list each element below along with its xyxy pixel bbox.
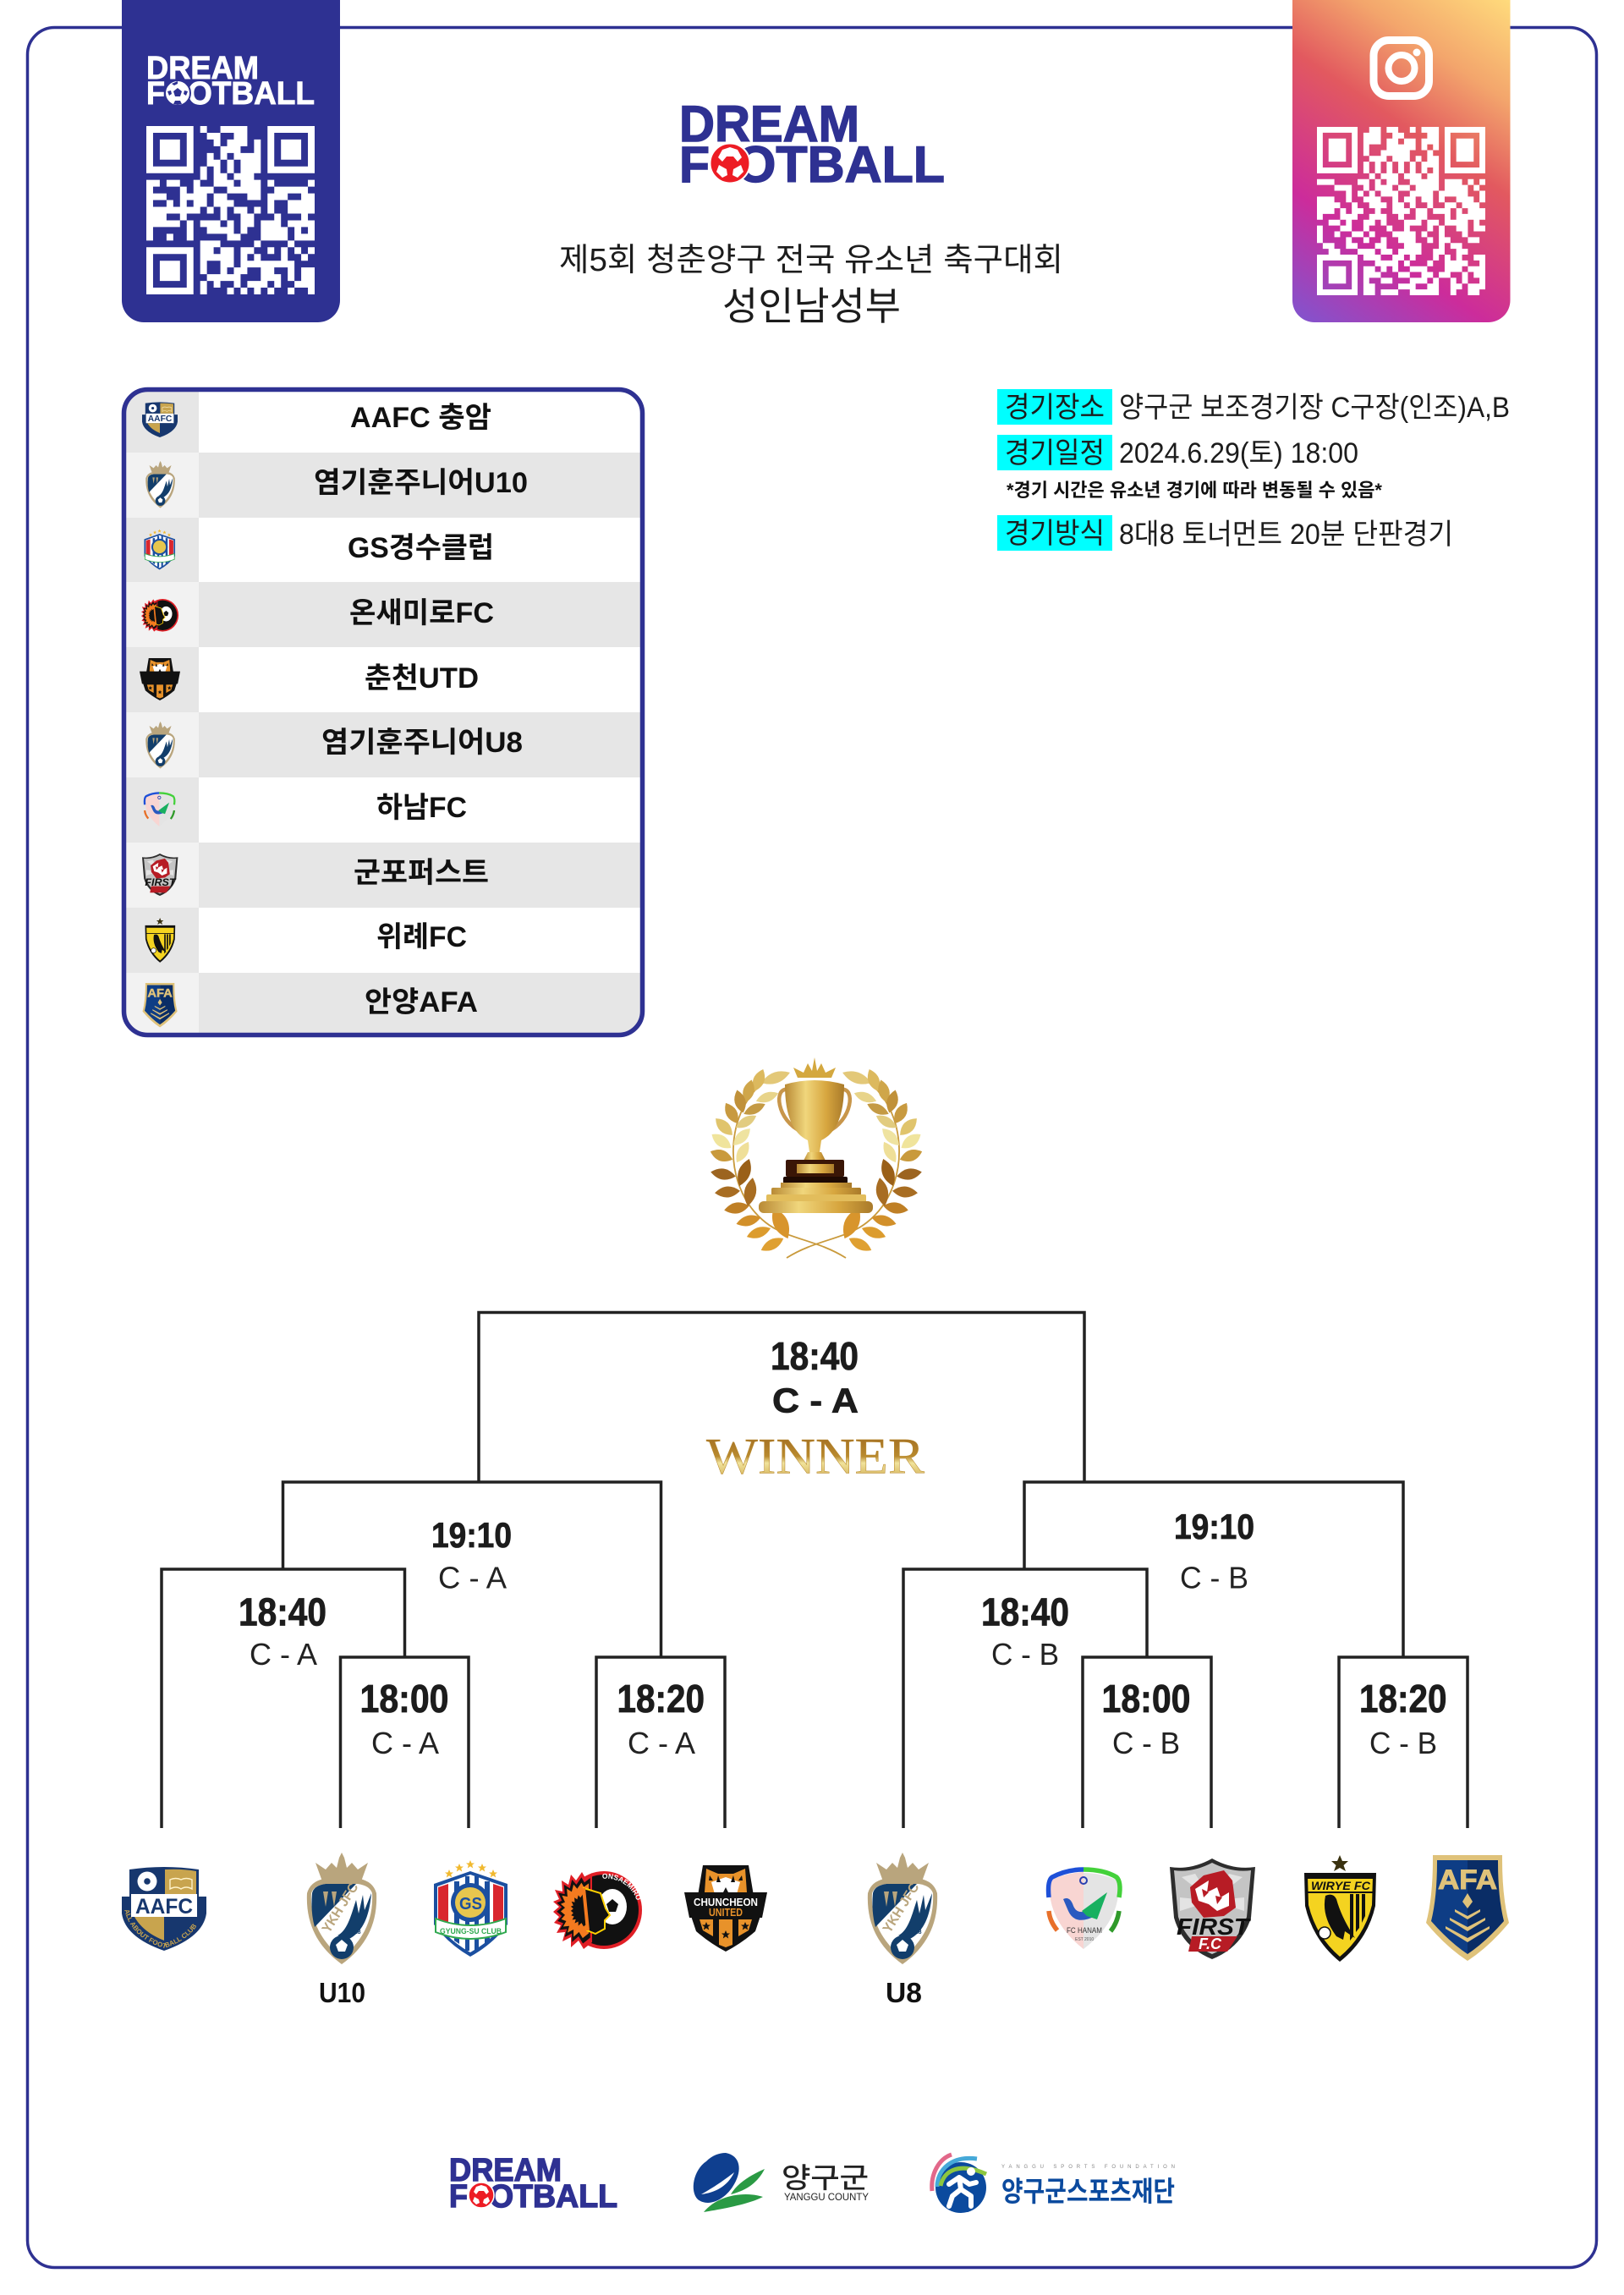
logo: dream football main: OTBALL — [736, 136, 945, 193]
crest: Onsaemiro — [553, 1871, 642, 1949]
crest: AAFC — [122, 1867, 206, 1951]
panel: match info: 경기방식 — [1005, 518, 1105, 550]
match label: right 18:20: 18:20 — [1359, 1677, 1446, 1721]
panel: dream football QR tab — [122, 0, 340, 322]
logo: dream football white: F — [146, 76, 165, 112]
QR code: dream football — [146, 129, 315, 291]
crest: AFA — [1426, 1855, 1509, 1961]
logo: yanggu sports foundation: 양구군스포츠재단 — [1001, 2176, 1175, 2207]
logo: dream football white: DREAM — [146, 51, 259, 86]
team row: 군포: FIRST — [145, 877, 176, 888]
crest: YKH JFC U8: YKH JFC — [881, 1880, 923, 1935]
logo: yanggu county: 양구군 — [782, 2162, 869, 2193]
team row: GS — [144, 530, 494, 569]
match label: right 18:00: C - B — [1112, 1726, 1180, 1760]
team row: 군포: 군포퍼스트 — [354, 857, 489, 889]
logo: dream football footer: OTBALL — [489, 2179, 617, 2215]
logo: yanggu county: YANGGU COUNTY — [784, 2191, 869, 2203]
panel: match info: 2024.6.29(토) 18:00 — [1119, 437, 1358, 469]
match label: left 18:00: 18:00 — [360, 1677, 448, 1721]
crest: YKH JFC U8: 2018 — [908, 1930, 922, 1935]
team row: 온새미로 — [141, 597, 494, 632]
quarterfinal label: right 18:40 — [981, 1590, 1069, 1672]
panel: match info — [997, 389, 1510, 551]
crest: First FC — [1170, 1859, 1255, 1959]
quarterfinal label: left 18:40: 18:40 — [239, 1590, 326, 1634]
team row: 춘천: 춘천UTD — [365, 662, 479, 695]
team row: U10 — [145, 461, 528, 508]
crest: YKH JFC U8 — [868, 1853, 937, 1964]
crest: FC Hanam: EST 2010 — [1075, 1937, 1094, 1942]
panel: match info: 8대8 토너먼트 20분 단판경기 — [1119, 519, 1453, 551]
match label: left 18:00: C - A — [371, 1726, 439, 1760]
label: U10: U10 — [319, 1977, 365, 2008]
crest: YKH JFC U10: 2018 — [348, 1930, 361, 1935]
crest: First FC: F.C — [1199, 1935, 1222, 1952]
match label: left 18:20: C - A — [628, 1726, 695, 1760]
match label: right 18:00 — [1101, 1677, 1191, 1760]
final match label: C - A — [772, 1381, 859, 1419]
team row: 하남 — [145, 792, 467, 826]
match label: left 18:00 — [360, 1677, 448, 1760]
panel: instagram QR tab — [1292, 0, 1511, 322]
crest: YKH JFC U10 — [307, 1853, 376, 1964]
semifinal label: left — [431, 1515, 512, 1595]
semifinal label: left: 19:10 — [431, 1515, 512, 1555]
logo: yanggu sports foundation: YANGGU SPORTS FOUNDATION — [1001, 2165, 1175, 2170]
team row: GS: GS경수클럽 — [348, 532, 494, 564]
panel: match info: *경기 시간은 유소년 경기에 따라 변동될 수 있음* — [1007, 480, 1382, 501]
crest: Chuncheon United — [684, 1865, 767, 1952]
match label: right 18:20: C - B — [1369, 1726, 1437, 1760]
crest: First FC: FIRST — [1177, 1913, 1252, 1940]
team row: U8 — [145, 722, 523, 768]
logo: dream football white: OTBALL — [188, 76, 315, 112]
subtitle: 성인남성부 — [722, 284, 901, 328]
logo: yanggu county — [694, 2153, 869, 2212]
crest: Onsaemiro: ONSAEMIRO — [602, 1873, 640, 1900]
team row: 군포 — [142, 854, 489, 896]
semifinal label: left: C - A — [438, 1560, 507, 1595]
logo: dream football main: F — [679, 136, 710, 193]
team row: 하남: 하남FC — [376, 792, 467, 824]
team row: 안양 — [142, 983, 478, 1027]
title — [559, 243, 1063, 328]
team row: 온새미로: 온새미로FC — [349, 597, 494, 629]
title: 제5회 청춘양구 전국 유소년 축구대회 — [559, 243, 1063, 278]
semifinal label: right — [1174, 1507, 1254, 1595]
team row: 춘천 — [140, 658, 479, 700]
team row: AAFC — [142, 402, 491, 437]
crest: Wirye FC — [1304, 1855, 1376, 1962]
crest: FC Hanam: FC HANAM — [1067, 1926, 1102, 1935]
final match label — [706, 1334, 924, 1484]
logo: dream football white — [146, 51, 315, 112]
logo: dream football footer — [449, 2153, 617, 2215]
logo: dream football footer: F — [449, 2179, 468, 2215]
match label: left 18:20 — [617, 1677, 705, 1760]
icon: trophy with laurel wreath — [709, 1057, 924, 1258]
panel: match info: 양구군 보조경기장 C구장(인조)A,B — [1119, 392, 1510, 424]
label: U8: U8 — [886, 1977, 922, 2008]
QR code: instagram — [1317, 129, 1485, 293]
panel: match info: 경기일정 — [1005, 437, 1105, 469]
logo: dream football footer: DREAM — [449, 2153, 562, 2188]
panel: match info: 경기장소 — [1005, 392, 1105, 424]
team row: U10: 염기훈주니어U10 — [314, 467, 528, 499]
crest: Wirye FC: WIRYE FC — [1311, 1879, 1371, 1892]
team row: 안양: AFA — [147, 986, 173, 999]
quarterfinal label: right 18:40: 18:40 — [981, 1590, 1069, 1634]
semifinal label: right: C - B — [1180, 1560, 1248, 1595]
team row: U8: 염기훈주니어U8 — [321, 727, 523, 759]
crest: GS Gyung-su club: GYUNG-SU CLUB — [440, 1927, 502, 1936]
crest: YKH JFC U10: YKH JFC — [320, 1880, 362, 1935]
crest: AAFC: AAFC — [135, 1895, 193, 1919]
panel: team list — [123, 389, 643, 1035]
crest: AAFC: ALL ABOUT FOOTBALL CLUB — [124, 1910, 196, 1948]
team row: AAFC: AAFC 충암 — [350, 402, 491, 434]
winner label: WINNER — [706, 1428, 924, 1484]
quarterfinal label: left 18:40: C - A — [250, 1637, 317, 1672]
team row: 안양: 안양AFA — [365, 986, 478, 1018]
semifinal label: right: 19:10 — [1174, 1507, 1254, 1546]
quarterfinal label: left 18:40 — [239, 1590, 326, 1672]
crest: AFA: AFA — [1438, 1864, 1497, 1895]
match label: right 18:00: 18:00 — [1101, 1677, 1191, 1721]
icon: instagram — [1374, 41, 1429, 96]
crest: FC Hanam — [1049, 1869, 1120, 1949]
crest: Chuncheon United: CHUNCHEON — [694, 1896, 758, 1908]
team row: 위례 — [145, 918, 467, 963]
match label: left 18:20: 18:20 — [617, 1677, 705, 1721]
quarterfinal label: right 18:40: C - B — [991, 1637, 1059, 1672]
team row: 위례: 위례FC — [376, 921, 467, 953]
logo: dream football main — [679, 96, 945, 193]
crest: GS Gyung-su club — [434, 1860, 508, 1957]
logo: dream football main: DREAM — [679, 96, 859, 152]
final match label: 18:40 — [771, 1334, 859, 1378]
tournament bracket lines — [162, 1313, 1468, 1828]
logo: yanggu sports foundation — [932, 2155, 1175, 2213]
crest: GS Gyung-su club: GS — [459, 1895, 482, 1913]
match label: right 18:20 — [1359, 1677, 1446, 1760]
team row: AAFC: AAFC — [148, 415, 172, 424]
crest: Chuncheon United: UNITED — [709, 1906, 743, 1919]
